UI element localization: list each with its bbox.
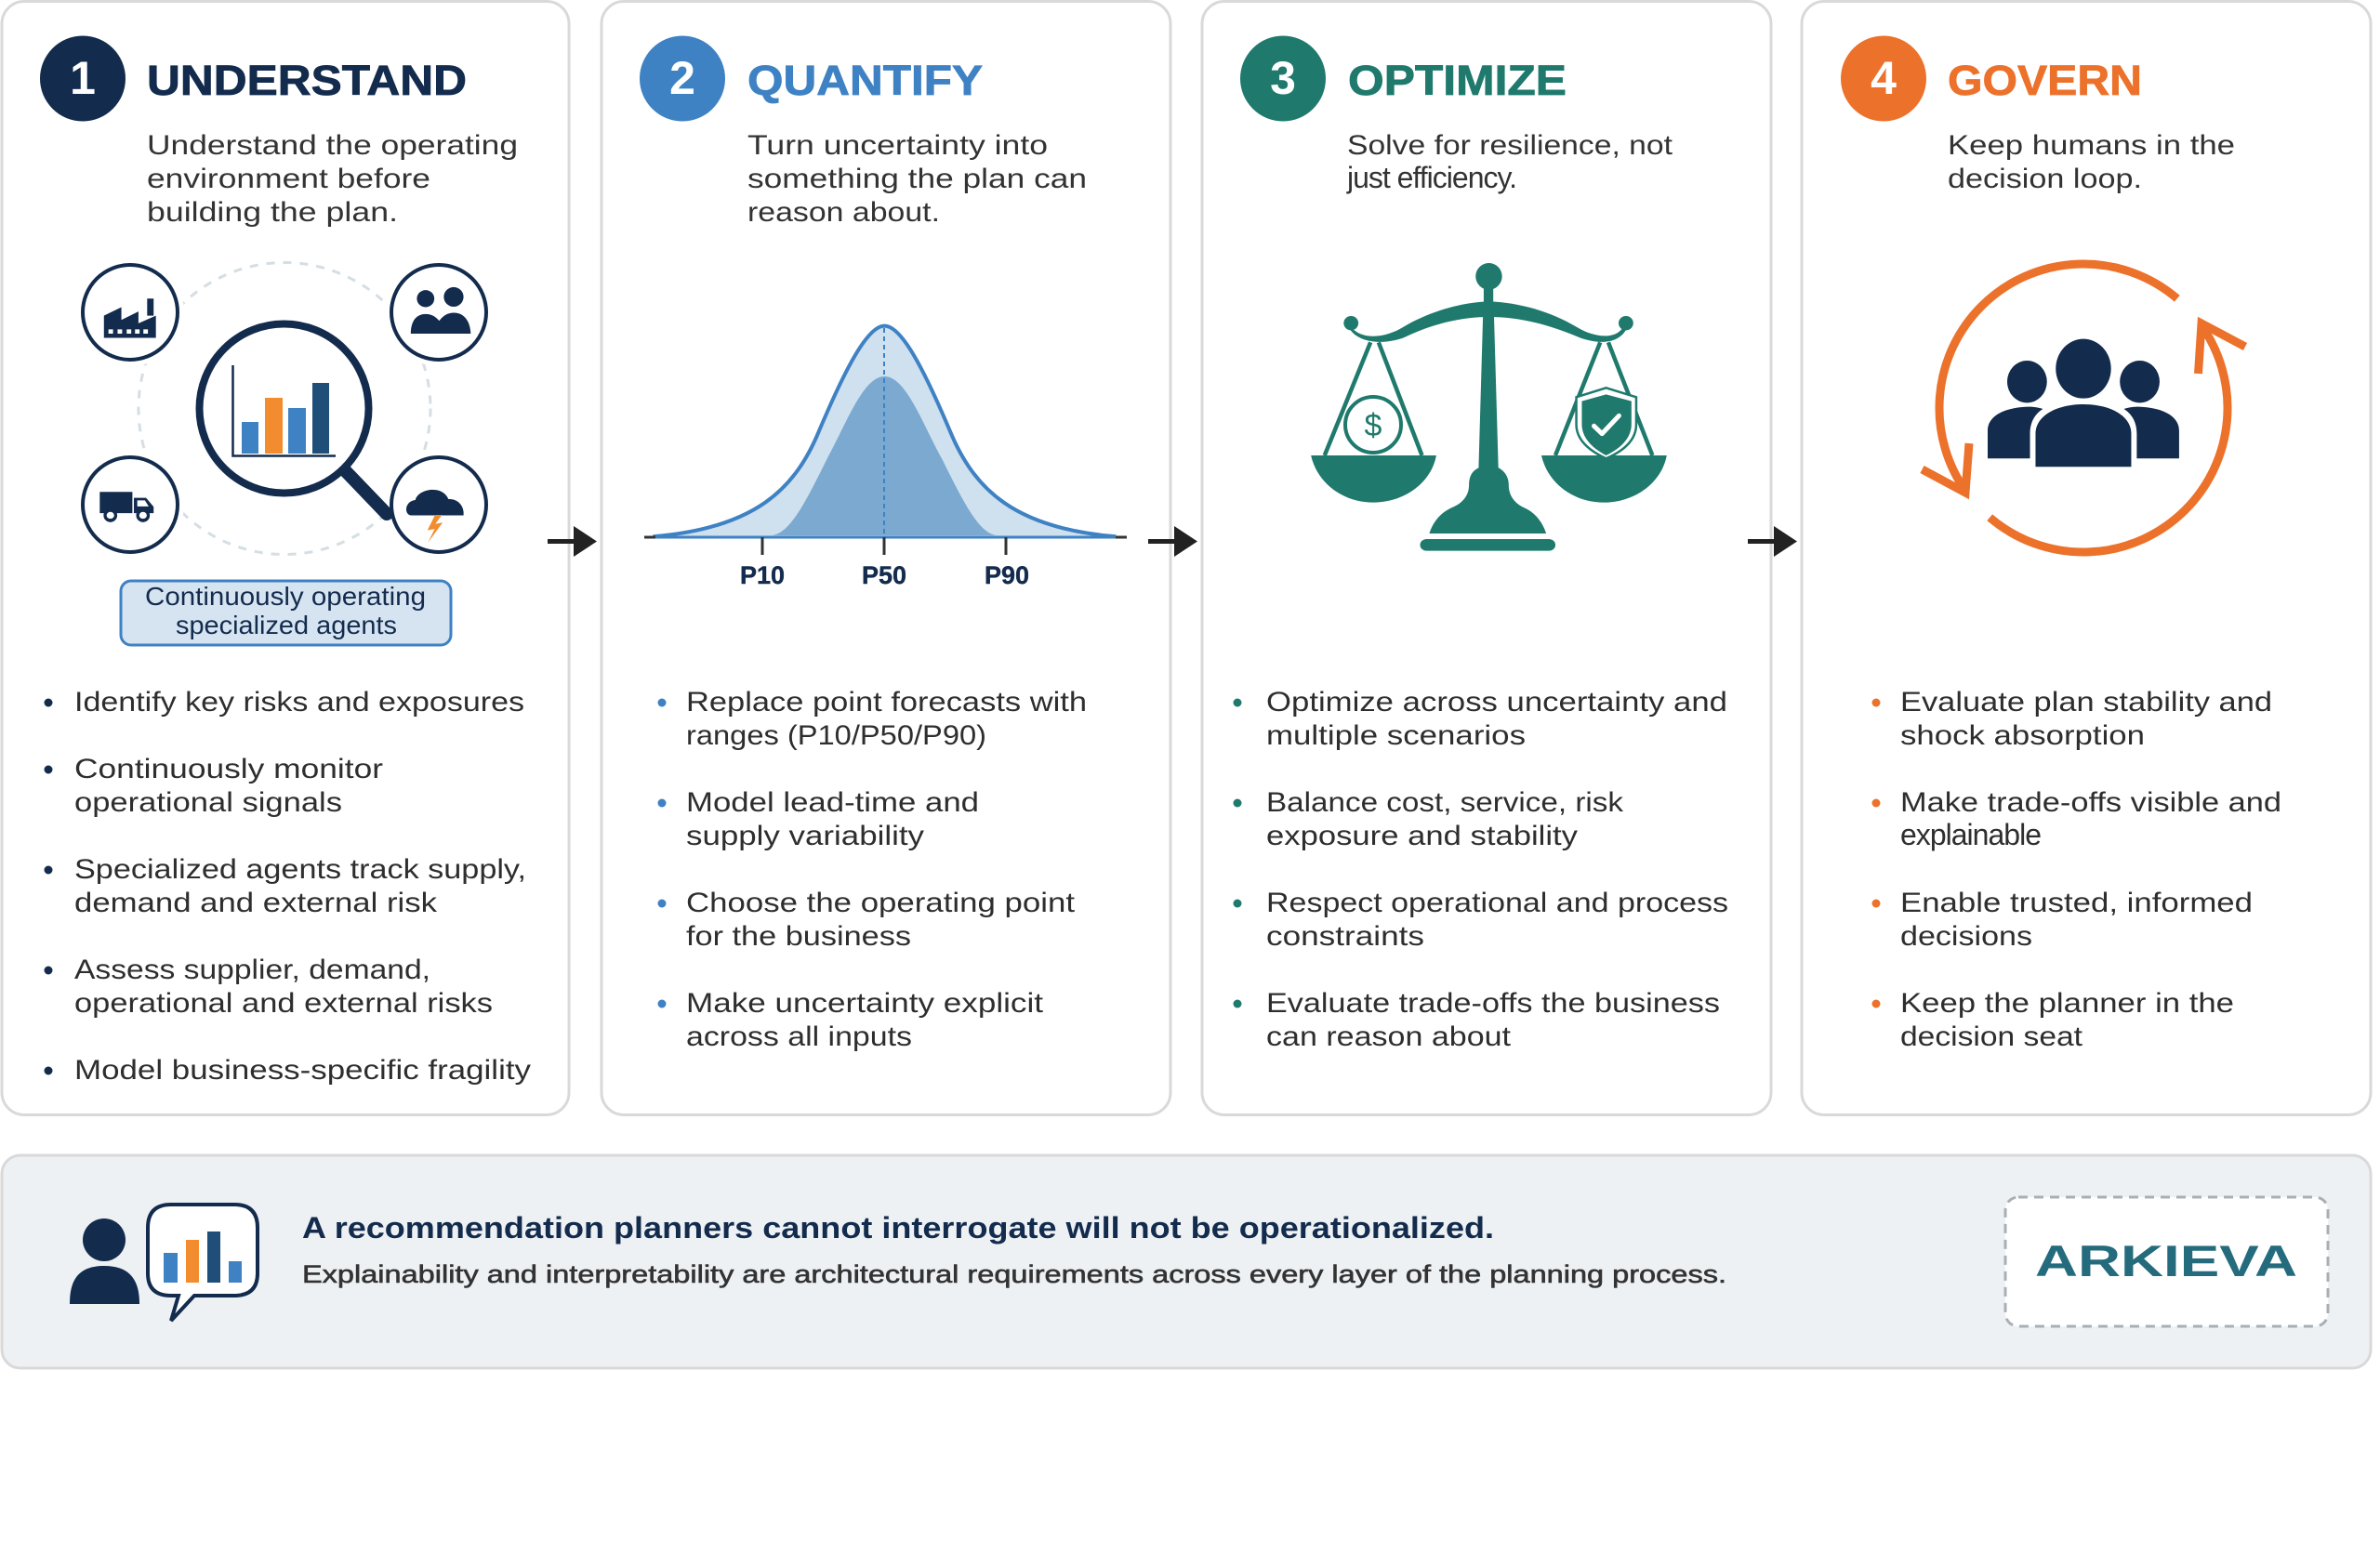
subtitle: Turn uncertainty into: [747, 130, 1048, 161]
bullet list: operational and external risks: [74, 988, 493, 1019]
subtitle: [747, 130, 1087, 228]
icon: balance scale: [1311, 263, 1667, 551]
step number 3: [1240, 35, 1326, 121]
subtitle: decision loop.: [1948, 164, 2142, 194]
callout: specialized agents: [121, 581, 451, 645]
bullet list: Model lead-time and: [686, 787, 979, 818]
arrow: quantify to optimize: [1148, 526, 1197, 557]
footer supporting text: Explainability and interpretability are architectural requirements across every layer of the planning process.: [302, 1260, 1726, 1288]
bullet list: Make trade-offs visible and: [1900, 787, 2281, 818]
chart: probability distribution with P10 P50 P90: P90: [985, 561, 1029, 589]
chart: probability distribution with P10 P50 P90: P10: [740, 561, 785, 589]
panel: govern: [1802, 2, 2371, 1115]
bullet list: Specialized agents track supply,: [74, 854, 526, 885]
heading: understand: UNDERSTAND: [147, 57, 467, 104]
subtitle: Understand the operating: [147, 130, 518, 161]
subtitle: building the plan.: [147, 197, 398, 228]
subtitle: [1346, 130, 1673, 194]
bullet list: Assess supplier, demand,: [74, 955, 430, 985]
chart: probability distribution with P10 P50 P90: P50: [862, 561, 906, 589]
logo: arkieva: ARKIEVA: [2035, 1236, 2297, 1285]
subtitle: just efficiency.: [1346, 161, 1517, 194]
step number 3: 3: [1270, 52, 1296, 104]
bullet list: [45, 687, 531, 1086]
icon: shield with check: [1577, 388, 1636, 458]
arrow: optimize to govern: [1748, 526, 1797, 557]
icon: storm cloud: [385, 451, 493, 559]
bar chart: [232, 365, 336, 455]
subtitle: environment before: [147, 164, 430, 194]
bullet list: across all inputs: [686, 1021, 912, 1052]
bullet list: Identify key risks and exposures: [74, 687, 524, 718]
bullet list: Evaluate trade-offs the business: [1266, 988, 1720, 1019]
bullet list: can reason about: [1266, 1021, 1512, 1052]
illustration: magnifier with risk signal icons: [76, 258, 493, 559]
subtitle: Keep humans in the: [1948, 130, 2235, 161]
bullet list: Continuously monitor: [74, 754, 383, 784]
bullet list: constraints: [1266, 921, 1424, 952]
bullet list: for the business: [686, 921, 911, 952]
bullet list: Optimize across uncertainty and: [1266, 687, 1727, 718]
bullet list: Enable trusted, informed: [1900, 888, 2253, 918]
heading: quantify: QUANTIFY: [747, 57, 983, 104]
icon: dollar coin: $: [1365, 408, 1382, 443]
people group: [1988, 339, 2179, 467]
chart: probability distribution with P10 P50 P90: [644, 326, 1127, 589]
bullet list: Evaluate plan stability and: [1900, 687, 2272, 718]
panel: footer: [2, 1155, 2371, 1368]
icon: people: [385, 258, 493, 366]
footer headline: A recommendation planners cannot interrogate will not be operationalized.: [302, 1211, 1494, 1245]
icon: truck: [76, 451, 184, 559]
logo: arkieva: [2005, 1197, 2328, 1326]
callout: specialized agents: specialized agents: [176, 611, 397, 639]
icon: planner with chart speech bubble: [70, 1205, 258, 1321]
bullet list: decision seat: [1900, 1021, 2083, 1052]
bullet list: multiple scenarios: [1266, 720, 1526, 751]
arrow: understand to quantify: [548, 526, 597, 557]
callout: specialized agents: Continuously operating: [145, 582, 426, 611]
heading: optimize: OPTIMIZE: [1348, 57, 1567, 104]
step number 4: 4: [1871, 52, 1897, 104]
step number 2: [640, 35, 725, 121]
bullet list: shock absorption: [1900, 720, 2145, 751]
bullet list: Respect operational and process: [1266, 888, 1728, 918]
bullet list: Balance cost, service, risk: [1266, 787, 1624, 818]
step number 1: [40, 35, 126, 121]
subtitle: reason about.: [747, 197, 940, 228]
heading: govern: GOVERN: [1948, 57, 2142, 104]
circular arrows: [1923, 264, 2245, 552]
subtitle: Solve for resilience, not: [1347, 130, 1673, 161]
bullet list: ranges (P10/P50/P90): [686, 720, 986, 751]
subtitle: [1948, 130, 2235, 194]
panel: optimize: [1202, 2, 1771, 1115]
bullet list: Choose the operating point: [686, 888, 1076, 918]
bullet list: Replace point forecasts with: [686, 687, 1087, 718]
bullet list: [1872, 687, 2281, 1052]
step number 4: [1841, 35, 1926, 121]
bullet list: exposure and stability: [1266, 821, 1578, 851]
panel: understand: [2, 2, 569, 1115]
bullet list: [658, 687, 1087, 1052]
step number 2: 2: [669, 52, 695, 104]
bullet list: decisions: [1900, 921, 2032, 952]
bullet list: [1233, 687, 1728, 1052]
icon: factory: [76, 258, 184, 366]
bullet list: Make uncertainty explicit: [686, 988, 1044, 1019]
bullet list: explainable: [1900, 818, 2042, 851]
icon: magnifier: [199, 323, 387, 514]
icon: human in the loop cycle: [1923, 264, 2245, 552]
bullet list: Model business-specific fragility: [74, 1055, 531, 1086]
bullet list: operational signals: [74, 787, 342, 818]
subtitle: [147, 130, 518, 228]
bullet list: supply variability: [686, 821, 924, 851]
step number 1: 1: [70, 52, 96, 104]
panel: quantify: [602, 2, 1170, 1115]
subtitle: something the plan can: [747, 164, 1087, 194]
icon: dollar coin: [1345, 397, 1401, 453]
bullet list: demand and external risk: [74, 888, 438, 918]
bullet list: Keep the planner in the: [1900, 988, 2234, 1019]
